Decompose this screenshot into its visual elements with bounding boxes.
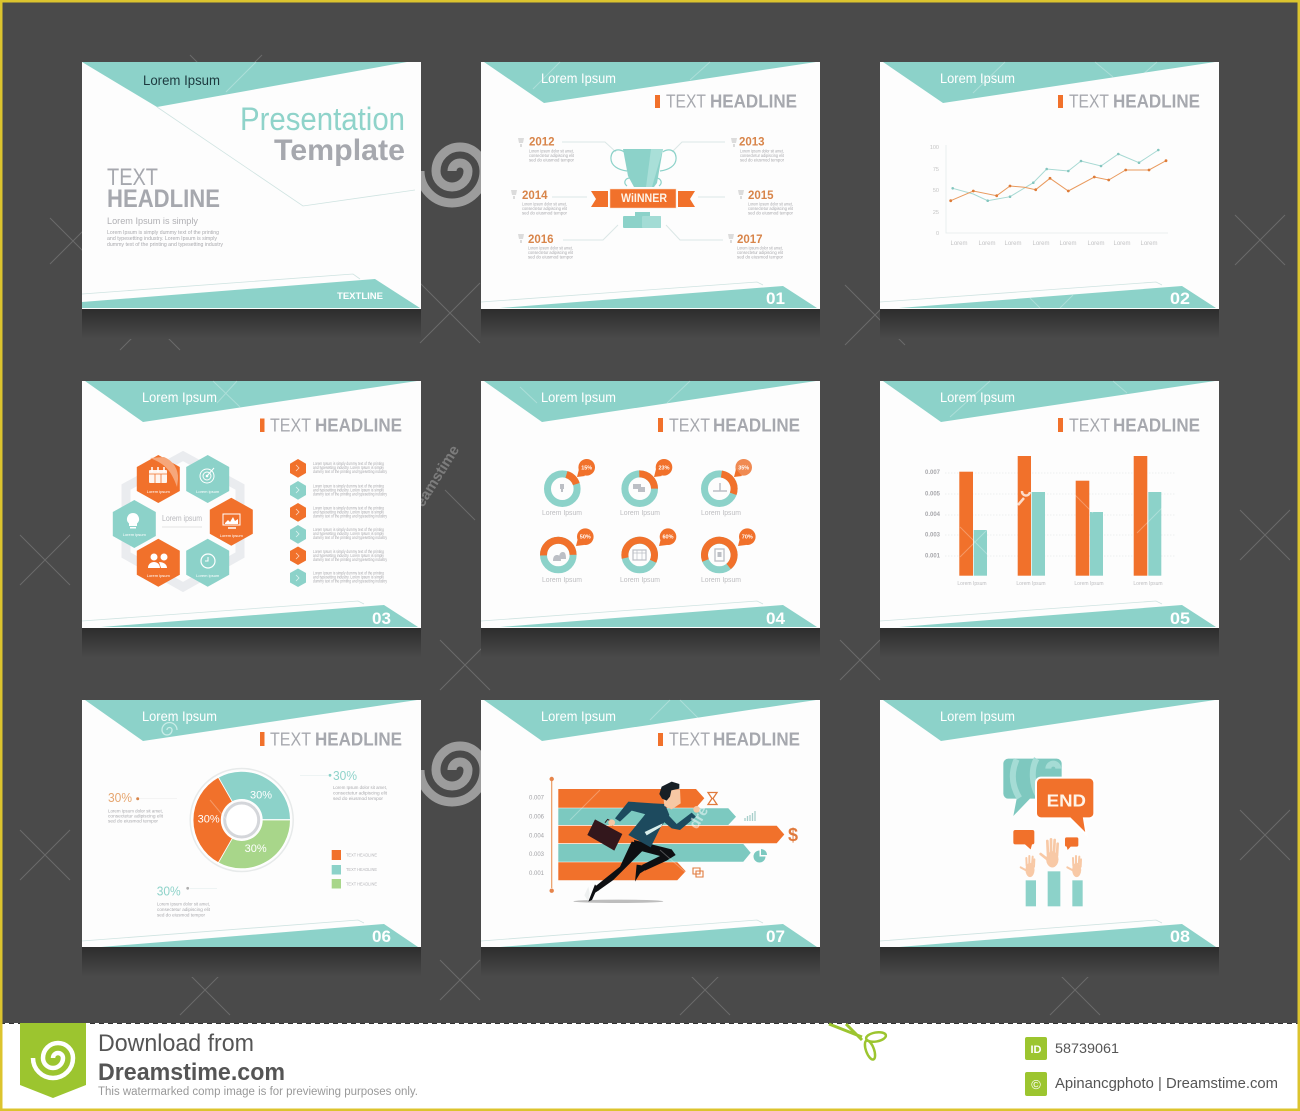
hexagon: target — [186, 455, 229, 503]
back leg and shoe — [588, 842, 648, 902]
donut 50%: Lorem Ipsum — [542, 575, 582, 584]
list: six steps: Lorem Ipsum is simply dummy text of the printing — [313, 506, 385, 510]
torso — [628, 803, 669, 847]
hexagon: monitor — [210, 498, 253, 546]
slide: cover — [82, 62, 421, 309]
back hand — [608, 819, 615, 826]
callout top right: 30% — [333, 768, 357, 783]
hexagon: light bulb — [113, 500, 156, 548]
tie — [645, 823, 663, 835]
slide base — [880, 700, 1219, 947]
list: six steps: dummy text of the printing and typesetting industry — [313, 557, 388, 562]
series: orange — [949, 159, 1167, 202]
sleeves — [1026, 871, 1083, 906]
small trophy markers — [511, 138, 744, 243]
donut 35% — [701, 459, 752, 517]
y axis labels: 0.003 — [925, 533, 941, 539]
line chart: 75 — [933, 167, 939, 173]
slide base: Lorem Ipsum — [940, 389, 1015, 405]
hexagon: people — [137, 539, 180, 587]
milestone 2015: 2015 — [748, 190, 774, 202]
slide base: TEXT — [669, 416, 710, 436]
slide base: 02 — [1170, 289, 1190, 308]
small bubble right — [1065, 837, 1078, 850]
milestone 2014: Lorem Ipsum dolor sit amet, — [522, 202, 567, 206]
line chart: 100 — [930, 145, 939, 151]
milestone 2015: sed do eiusmod tempor — [748, 210, 794, 216]
white shoe highlight — [584, 887, 590, 901]
pie chart: 30% — [245, 843, 267, 855]
donut 35%: Lorem Ipsum — [701, 508, 741, 517]
milestone 2016: 2016 — [528, 234, 554, 246]
slide base: Lorem Ipsum — [541, 708, 616, 724]
orange bubble — [1036, 778, 1094, 835]
slide base: TEXT — [270, 416, 311, 436]
y axis labels — [925, 470, 941, 559]
milestone 2017 — [737, 234, 784, 260]
milestone 2016 — [528, 234, 574, 260]
front hand — [693, 806, 700, 813]
series: teal — [951, 149, 1160, 202]
legend: TEXT HEADLINE — [346, 882, 377, 886]
hand right — [1067, 856, 1081, 877]
slide base — [481, 700, 820, 947]
slide base: HEADLINE — [315, 416, 402, 436]
hexagon: monitor: Lorem ipsum — [220, 533, 244, 538]
teal bubble — [1003, 759, 1062, 816]
ID badge: ID — [1030, 1044, 1042, 1056]
slide base: 08 — [1170, 927, 1190, 946]
callout top right: Lorem Ipsum dolor sit amet, — [333, 785, 387, 790]
hexagon: calendar: Lorem ipsum — [147, 489, 171, 494]
x axis labels: Lorem — [1087, 241, 1105, 247]
title: Presentation: Presentation — [240, 101, 405, 137]
milestone 2016: sed do eiusmod tempor — [528, 254, 574, 260]
callout bottom: Lorem Ipsum dolor sit amet, — [157, 902, 210, 906]
callout left: sed do eiusmod tempor — [108, 818, 159, 824]
list: six steps: and typesetting industry. Lorem Ipsum is simply — [313, 488, 385, 492]
callout left: 30% — [108, 790, 132, 805]
callout bottom — [157, 884, 217, 918]
heading: Dreamstime.com: Dreamstime.com — [98, 1059, 285, 1086]
image ID: 58739061 — [1055, 1040, 1119, 1056]
list: six steps: and typesetting industry. Lorem Ipsum is simply — [313, 465, 385, 470]
slide base: HEADLINE — [1113, 92, 1200, 112]
slide shadows — [82, 309, 1219, 977]
hexagon: target: Lorem ipsum — [196, 489, 220, 494]
body text: and typesetting industry. Lorem Ipsum is simply — [107, 236, 218, 242]
headline: HEADLINE: HEADLINE — [107, 185, 220, 213]
slide base: 04 — [766, 609, 786, 628]
slide base: TEXT — [1069, 92, 1109, 112]
milestone 2014: sed do eiusmod tempor — [522, 210, 568, 216]
winner ribbon — [591, 189, 695, 208]
slide base: 05 — [1170, 609, 1190, 628]
vertical scale — [529, 777, 554, 893]
milestone 2012 — [529, 136, 575, 162]
line chart: 50 — [933, 188, 939, 194]
disclaimer: This watermarked comp image is for previewing purposes only. — [98, 1086, 418, 1098]
icon: scissors — [829, 1024, 887, 1061]
slide 03: hexagon cycle — [82, 381, 421, 628]
callout top right: consectetur adipiscing elit — [333, 790, 388, 796]
segment: green — [218, 820, 290, 869]
bottom teal band — [82, 279, 420, 308]
list: six steps: dummy text of the printing and typesetting industry — [313, 492, 388, 496]
milestone 2015: Lorem Ipsum dolor sit amet, — [748, 202, 793, 206]
pie chart: 30% — [198, 813, 220, 825]
donut 15% — [542, 459, 595, 517]
cover label: Lorem Ipsum — [143, 73, 220, 88]
milestone 2013: consectetur adipiscing elit — [740, 153, 785, 158]
slide base: Lorem Ipsum — [142, 389, 217, 405]
slide base: TEXT — [270, 730, 311, 750]
footer strip — [0, 1023, 1300, 1111]
slide base: 06 — [372, 927, 391, 946]
slide base: 07 — [766, 927, 785, 946]
ID badge — [1025, 1037, 1047, 1060]
donut 23% — [620, 459, 672, 517]
milestone 2012: consectetur adipiscing elit — [529, 153, 575, 158]
donut 60%: 60% — [662, 535, 674, 541]
milestone 2016: consectetur adipiscing elit — [528, 250, 574, 255]
hexagon centre label — [162, 514, 202, 527]
segment: orange — [193, 777, 232, 863]
callout bottom: sed do eiusmod tempor — [157, 912, 206, 918]
slide base — [481, 381, 820, 628]
slide base: TEXT — [1069, 416, 1110, 436]
slide base — [481, 62, 820, 309]
milestone 2013: 2013 — [739, 136, 765, 148]
briefcase — [587, 819, 622, 851]
copyright badge — [1025, 1072, 1047, 1096]
milestone 2012: Lorem Ipsum dolor sit amet, — [529, 148, 574, 154]
pie chart — [190, 768, 293, 872]
vertical scale: 0.004 — [529, 834, 545, 840]
donut 50%: 50% — [580, 535, 591, 541]
list: six steps: and typesetting industry. Lorem Ipsum is simply — [313, 531, 385, 536]
milestone 2017: sed do eiusmod tempor — [737, 254, 784, 260]
slide 07: runner with arrows — [481, 700, 820, 947]
vertical scale: 0.001 — [529, 871, 545, 877]
callout bottom: consectetur adipiscing elit — [157, 907, 211, 912]
milestone 2017: consectetur adipiscing elit — [737, 250, 784, 255]
list: six steps: Lorem Ipsum is simply dummy text of the printing — [313, 461, 385, 466]
x axis labels: Lorem — [1059, 241, 1077, 247]
slide base: HEADLINE — [713, 416, 800, 436]
slide base: HEADLINE — [315, 730, 402, 750]
hexagon: clock — [186, 539, 229, 587]
watermark swirl on header — [162, 722, 177, 735]
title: Template: Template — [274, 134, 405, 167]
list: six steps: Lorem Ipsum is simply dummy text of the printing — [313, 549, 385, 554]
y axis labels: 0.001 — [925, 553, 941, 559]
small bubble left — [1013, 830, 1034, 849]
legend: TEXT HEADLINE — [346, 867, 377, 872]
donut 23%: 23% — [658, 465, 670, 471]
callout top right: sed do eiusmod tempor — [333, 796, 384, 801]
donut 15%: 15% — [581, 465, 592, 471]
donut 60%: Lorem Ipsum — [620, 575, 660, 584]
icon: hourglass — [708, 792, 717, 804]
milestone 2014: 2014 — [522, 190, 548, 202]
watermark word: eamstime — [412, 442, 463, 510]
list: six steps: Lorem Ipsum is simply dummy text of the printing — [313, 570, 385, 576]
milestone 2014: consectetur adipiscing elit — [522, 206, 568, 211]
callout left: Lorem Ipsum dolor sit amet, — [108, 808, 163, 814]
milestone 2017: 2017 — [737, 234, 763, 246]
front arm — [662, 813, 696, 830]
hexagon centre label: Lorem ipsum — [162, 514, 202, 523]
slide base: Lorem Ipsum — [541, 389, 616, 405]
line chart: 0 — [936, 231, 939, 237]
x axis labels: Lorem — [1113, 241, 1131, 247]
x axis labels — [957, 581, 1163, 587]
slide base — [880, 62, 1219, 309]
milestone 2014 — [522, 190, 568, 216]
icon: dollar: $ — [788, 825, 798, 845]
decorative frame lines — [157, 107, 415, 206]
slide base: HEADLINE — [713, 730, 800, 750]
list: six steps: and typesetting industry. Lorem Ipsum is simply — [313, 574, 385, 580]
speech bubbles and hands — [1003, 759, 1094, 906]
milestone 2013 — [739, 136, 785, 162]
donut 70%: 70% — [742, 535, 753, 541]
slide base: TEXT — [669, 730, 710, 750]
hair — [659, 782, 679, 801]
legend — [332, 850, 377, 888]
icon: pie — [754, 849, 767, 862]
slide base: Lorem Ipsum — [142, 708, 217, 724]
icon: growth bars — [745, 811, 755, 821]
runner illustration — [573, 782, 700, 903]
slide base — [82, 700, 421, 947]
list: six steps: dummy text of the printing and typesetting industry — [313, 535, 388, 540]
hand centre — [1041, 839, 1058, 867]
watermark swirl on bar chart — [1018, 491, 1030, 505]
x axis labels — [950, 241, 1158, 247]
connector lines — [552, 142, 725, 240]
grey hexagon backdrop — [126, 456, 240, 587]
slide 05: bar chart — [880, 381, 1219, 628]
credit: Apinancgphoto | Dreamstime.com — [1055, 1076, 1278, 1092]
donut 35%: 35% — [738, 465, 749, 471]
bars — [959, 456, 1161, 576]
ground shadow — [573, 900, 663, 903]
list: six steps: Lorem Ipsum is simply dummy text of the printing — [313, 527, 385, 532]
END label: END — [1047, 791, 1086, 811]
slide base — [82, 381, 421, 628]
watermark lines over slides — [210, 62, 1163, 885]
slide base: Lorem Ipsum — [541, 70, 616, 86]
donut 23%: Lorem Ipsum — [620, 508, 660, 517]
milestone 2015: consectetur adipiscing elit — [748, 206, 794, 211]
hexagon: clock: Lorem ipsum — [196, 573, 220, 578]
top teal band — [82, 62, 407, 107]
x axis labels: Lorem — [950, 241, 968, 247]
slide 02: line chart — [880, 62, 1219, 309]
line chart: 25 — [933, 210, 939, 216]
hexagon: calendar — [137, 455, 180, 503]
slide base: 01 — [766, 289, 785, 308]
milestone 2017: Lorem Ipsum dolor sit amet, — [737, 246, 783, 250]
list: six steps: Lorem Ipsum is simply dummy text of the printing — [313, 484, 385, 488]
bar chart — [925, 456, 1175, 587]
watermark spiral upper — [420, 147, 484, 203]
donut 60% — [620, 528, 676, 584]
milestone 2012: 2012 — [529, 136, 555, 148]
hand left — [1021, 856, 1034, 877]
slide base: TEXT — [666, 92, 706, 112]
y axis labels: 0.004 — [925, 512, 941, 518]
hexagon: people: Lorem ipsum — [147, 573, 171, 578]
heading: Download from: Download from — [98, 1030, 254, 1057]
x axis labels: Lorem Ipsum — [1016, 581, 1046, 587]
icon: documents — [693, 868, 703, 877]
slide base: Lorem Ipsum — [940, 70, 1015, 86]
body text — [107, 230, 224, 248]
list: six steps — [290, 459, 388, 587]
list: six steps: dummy text of the printing and typesetting industry — [313, 469, 388, 474]
body text: dummy text of the printing and typesetting industry — [107, 242, 224, 248]
watermark swirl on bubble — [1013, 759, 1058, 798]
x axis labels: Lorem — [978, 241, 996, 247]
slide base: Lorem Ipsum — [940, 708, 1015, 724]
slide 01: winner timeline — [481, 62, 820, 309]
back arm — [615, 802, 653, 822]
donut 50% — [542, 528, 594, 584]
headline: TEXT: TEXT — [107, 164, 158, 191]
slide base — [880, 381, 1219, 628]
head — [663, 789, 681, 809]
vertical scale: 0.003 — [529, 852, 545, 858]
winner ribbon: WiINNER — [621, 191, 667, 205]
watermark letters: dre — [686, 803, 712, 832]
vertical scale: 0.007 — [529, 796, 545, 802]
list: six steps: dummy text of the printing and typesetting industry — [313, 514, 388, 518]
y axis labels: 0.007 — [925, 470, 941, 476]
line chart — [930, 145, 1168, 247]
list: six steps: dummy text of the printing and typesetting industry — [313, 578, 388, 584]
body text: Lorem Ipsum is simply dummy text of the printing — [107, 230, 219, 236]
list: six steps: and typesetting industry. Lorem Ipsum is simply — [313, 553, 385, 558]
callout left — [108, 790, 177, 824]
subheading: Lorem Ipsum is simply — [107, 216, 198, 227]
milestone 2016: Lorem Ipsum dolor sit amet, — [528, 246, 573, 250]
milestone 2015 — [748, 190, 794, 216]
x axis labels: Lorem — [1140, 241, 1158, 247]
slide 06: pie chart — [82, 700, 421, 947]
vertical scale: 0.006 — [529, 814, 545, 820]
slide base: HEADLINE — [710, 92, 797, 112]
hexagon: light bulb: Lorem ipsum — [123, 532, 147, 537]
hub — [225, 803, 259, 837]
x axis labels: Lorem — [1032, 241, 1050, 247]
list: six steps: and typesetting industry. Lorem Ipsum is simply — [313, 510, 385, 514]
slide 04: donut charts — [481, 381, 820, 628]
footer label: TEXTLINE — [337, 291, 383, 302]
callout left: consectetur adipiscing elit — [108, 814, 164, 818]
donut 70%: Lorem Ipsum — [701, 575, 741, 584]
slide 08: end — [880, 700, 1219, 947]
x axis labels: Lorem Ipsum — [957, 581, 987, 587]
milestone 2013: sed do eiusmod tempor — [740, 158, 785, 162]
y axis labels: 0.005 — [925, 491, 941, 497]
donut 70% — [700, 528, 756, 584]
slide base: 03 — [372, 609, 391, 628]
copyright badge: © — [1031, 1077, 1041, 1092]
pie chart: 30% — [250, 790, 272, 802]
x axis labels: Lorem Ipsum — [1133, 581, 1163, 587]
legend: TEXT HEADLINE — [346, 852, 377, 858]
milestone 2012: sed do eiusmod tempor — [529, 158, 575, 162]
callout bottom: 30% — [157, 884, 181, 899]
x axis labels: Lorem — [1004, 241, 1022, 247]
donut 15%: Lorem Ipsum — [542, 508, 582, 517]
slide base: HEADLINE — [1113, 416, 1200, 436]
green badge — [20, 1023, 86, 1098]
front leg and shoe — [634, 840, 676, 882]
icon: trophy — [611, 149, 676, 228]
milestone 2013: Lorem Ipsum dolor sit amet, — [740, 148, 784, 154]
watermark spiral lower — [420, 746, 484, 802]
x axis labels: Lorem Ipsum — [1074, 581, 1104, 587]
arrow bars — [558, 789, 784, 880]
callout top right — [300, 768, 388, 801]
segment: teal — [218, 771, 290, 820]
